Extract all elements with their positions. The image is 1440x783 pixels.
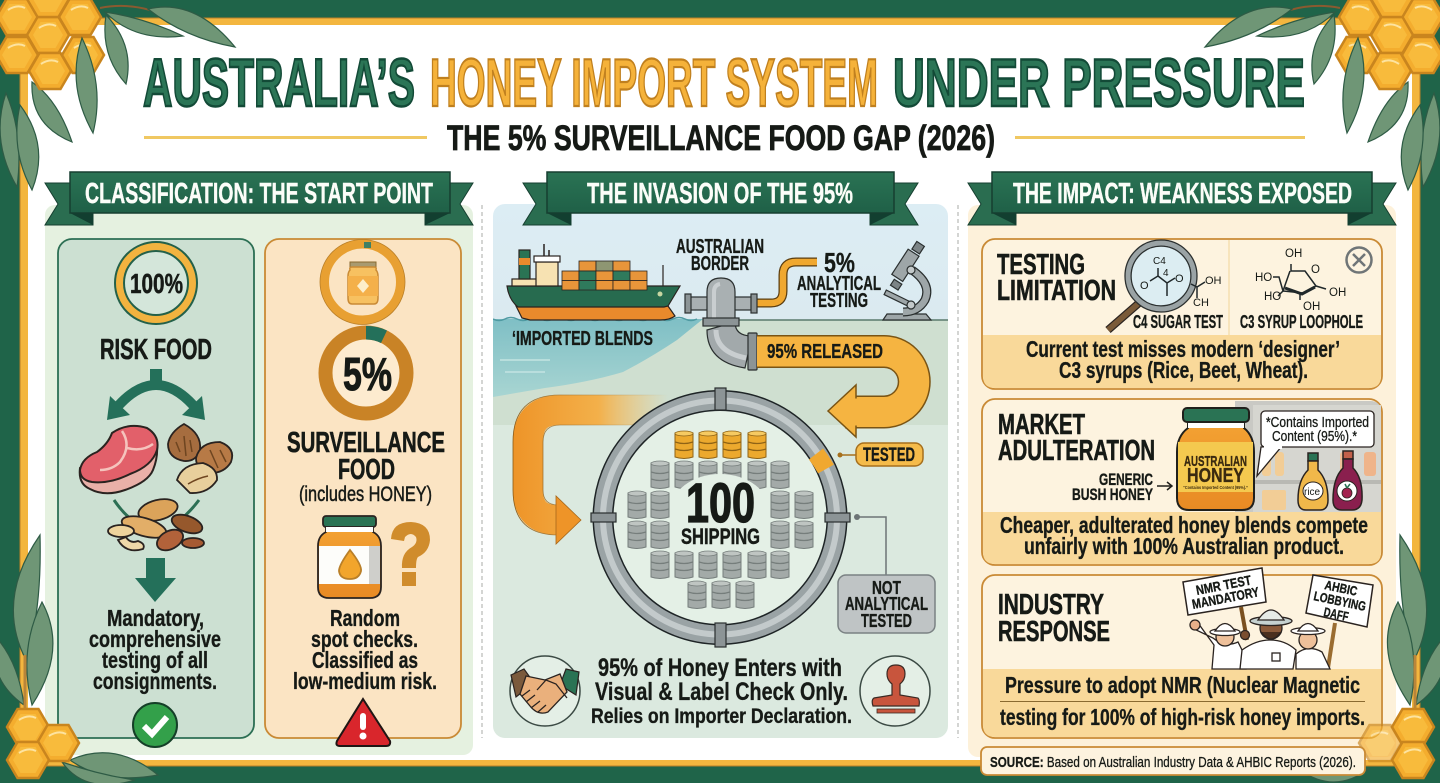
sea	[493, 318, 948, 397]
heading: surveillance food	[287, 427, 445, 506]
label: 5% analytical testing: TESTING	[810, 290, 868, 312]
card: industry response	[982, 568, 1382, 738]
banner: invasion: THE INVASION OF THE 95%	[587, 178, 853, 210]
heading	[998, 589, 1110, 648]
icon: check mark	[133, 703, 177, 747]
sign: NMR test mandatory: MANDATORY	[1191, 584, 1260, 612]
decoration: bottom-right leaves and honeycomb	[1300, 535, 1440, 782]
small gold pipe to testing	[755, 262, 817, 303]
text: visual and label check: Relies on Importer Declaration.	[591, 705, 852, 728]
heading: RESPONSE	[998, 616, 1110, 648]
sign: NMR test mandatory	[1183, 568, 1266, 615]
label: generic bush honey	[1072, 470, 1172, 504]
heading: INDUSTRY	[998, 589, 1104, 621]
label: 100 shipping: SHIPPING	[681, 524, 760, 549]
panel: the impact	[968, 205, 1396, 757]
text: cheaper blends: unfairly with 100% Australian product.	[1024, 533, 1344, 559]
sign: NMR test mandatory: NMR TEST	[1195, 572, 1253, 598]
sign: AHBIC lobbying DAFF: DAFF	[1322, 604, 1350, 624]
icon: question mark	[391, 522, 430, 586]
icon: jar ring	[320, 240, 405, 324]
card: surveillance food	[265, 239, 461, 746]
icon: 5% ring: 5%	[343, 348, 392, 400]
icon: down arrow	[135, 558, 176, 602]
label: C4 sugar test: C4 SUGAR TEST	[1133, 312, 1223, 332]
heading	[997, 249, 1116, 307]
icon: warning triangle	[336, 699, 390, 746]
arrow: 95% released	[757, 352, 914, 437]
label: australian honey: “Contains Imported Content (95%).”	[1183, 485, 1248, 490]
text: random spot checks: spot checks.	[311, 626, 418, 652]
sign: AHBIC lobbying DAFF: LOBBYING	[1312, 588, 1367, 614]
text: random spot checks: low-medium risk.	[293, 668, 437, 694]
source note: SOURCE: Based on Australian Industry Data & AHBIC Reports (2026).	[990, 754, 1356, 771]
text: mandatory testing: consignments.	[93, 668, 217, 694]
callout: not analytical tested: NOT	[872, 577, 902, 598]
decoration: top-left leaves and honeycomb	[0, 0, 235, 190]
icon: magnifier with C4 molecule: O	[1140, 280, 1149, 292]
icon: magnifier with C4 molecule	[1108, 240, 1222, 330]
icon: microscope	[883, 241, 931, 320]
callout: contains imported content: *Contains Imported	[1266, 415, 1369, 431]
heading: surveillance food: FOOD	[338, 454, 395, 486]
label: imported blends: ‘IMPORTED BLENDS	[512, 328, 653, 350]
heading: surveillance food: SURVEILLANCE	[287, 427, 445, 459]
icon: beet syrup bottle	[1333, 451, 1362, 510]
label: generic bush honey: GENERIC	[1099, 470, 1153, 489]
text: visual and label check	[591, 654, 852, 728]
callout: tested	[838, 443, 923, 466]
icon: C3 syrup molecule: OH	[1329, 287, 1346, 299]
panel: invasion of the 95%	[493, 204, 948, 738]
label: australian honey: AUSTRALIAN	[1184, 453, 1247, 470]
decoration: top-right leaves and honeycomb	[1205, 0, 1440, 190]
icon: C3 syrup molecule	[1255, 248, 1346, 313]
label: 100 shipping: 100	[686, 471, 755, 534]
heading: MARKET	[998, 409, 1085, 441]
heading: TESTING	[997, 249, 1085, 281]
text: mandatory testing: Mandatory,	[107, 605, 204, 631]
icon: 5% ring	[326, 326, 406, 414]
subtitle	[144, 119, 1305, 158]
icon: C3 syrup molecule: OH	[1285, 248, 1302, 260]
label: australian honey	[1183, 453, 1248, 490]
text: current test: Current test misses modern ‘designer’	[1026, 336, 1340, 362]
icon: whole nuts	[168, 424, 232, 493]
label: generic bush honey: BUSH HONEY	[1072, 485, 1153, 504]
icon: magnifier with C4 molecule: C4	[1153, 256, 1166, 267]
icon: splitting arrows	[107, 369, 205, 420]
callout: tested: TESTED	[863, 445, 915, 466]
panel: classification	[45, 205, 473, 755]
shelf background	[1235, 401, 1381, 512]
icon: cross mark	[1346, 248, 1372, 272]
text: mandatory testing: comprehensive	[89, 626, 221, 652]
icon: C3 syrup molecule: HO	[1264, 291, 1281, 303]
card: risk food	[58, 239, 254, 747]
heading: surveillance food: (includes HONEY)	[299, 483, 432, 506]
label: australian honey: HONEY	[1187, 465, 1245, 487]
divider	[482, 205, 958, 738]
label: australian border	[676, 238, 764, 270]
text: pressure to adopt NMR	[1000, 672, 1365, 730]
icon: magnifier with C4 molecule: O	[1175, 273, 1184, 285]
text: random spot checks: Random	[330, 605, 400, 631]
icon: mixed nuts	[108, 495, 205, 555]
heading	[998, 409, 1155, 467]
icon: stamp	[860, 656, 930, 726]
icon: rice syrup bottle: rice	[1304, 487, 1321, 498]
barrels: not tested	[628, 461, 813, 608]
subtitle: THE 5% SURVEILLANCE FOOD GAP (2026)	[447, 119, 995, 158]
text: mandatory testing: testing of all	[102, 647, 208, 673]
heading: ADULTERATION	[998, 435, 1155, 467]
callout: not analytical tested: TESTED	[861, 610, 912, 631]
text: mandatory testing	[89, 605, 221, 694]
callout: contains imported content	[1257, 411, 1374, 476]
text: cheaper blends	[1000, 512, 1368, 559]
heading: LIMITATION	[997, 275, 1116, 307]
text: visual and label check: 95% of Honey Enters with	[598, 654, 842, 682]
banner: impact	[968, 172, 1396, 225]
text: visual and label check: Visual & Label Check Only.	[595, 678, 848, 706]
title: AUSTRALIA’S	[143, 45, 415, 121]
callout: not analytical tested	[838, 514, 935, 633]
label: 95% released: 95% RELEASED	[767, 341, 883, 363]
icon: magnifier with C4 molecule: CH	[1193, 297, 1209, 309]
label: C3 syrup loophole: C3 SYRUP LOOPHOLE	[1240, 312, 1363, 332]
label: 5% analytical testing: ANALYTICAL	[797, 273, 881, 295]
sign: AHBIC lobbying DAFF	[1306, 575, 1373, 627]
banner: classification: CLASSIFICATION: THE START POINT	[85, 178, 433, 210]
icon: container ship	[507, 244, 680, 320]
tested ring segment	[816, 454, 826, 469]
icon: C3 syrup molecule: O	[1311, 264, 1320, 276]
decoration: bottom-left leaves and honeycomb	[0, 535, 158, 783]
card: testing limitation	[982, 239, 1382, 389]
arrow: orange inflow	[513, 395, 668, 544]
chart: pipe ring of 100 shipments	[591, 388, 850, 647]
callout: contains imported content: Content (95%).*	[1272, 429, 1357, 445]
banner: invasion	[523, 172, 918, 225]
icon: handshake	[510, 656, 580, 726]
barrels: tested	[675, 431, 766, 458]
label: australian border: AUSTRALIAN	[676, 236, 764, 258]
icon: C3 syrup molecule: HO	[1255, 272, 1272, 284]
card: market adulteration	[982, 399, 1382, 565]
icon: 100% ring: 100%	[130, 268, 183, 299]
icon: honey jar	[318, 516, 381, 598]
label: 5% analytical testing: 5%	[824, 247, 855, 278]
icon: C3 syrup molecule: OH	[1303, 301, 1320, 313]
label: australian border: BORDER	[691, 253, 749, 275]
icon: raw meat	[80, 426, 158, 493]
callout: not analytical tested: ANALYTICAL	[845, 593, 928, 614]
text: current test	[1026, 336, 1340, 383]
title: HONEY IMPORT SYSTEM	[430, 45, 878, 121]
icon: magnifier with C4 molecule: 4	[1163, 268, 1169, 279]
heading: risk food: RISK FOOD	[100, 334, 212, 366]
sign: AHBIC lobbying DAFF: AHBIC	[1323, 577, 1359, 599]
text: random spot checks	[293, 605, 437, 694]
text: random spot checks: Classified as	[312, 647, 418, 673]
icon: rice syrup bottle	[1298, 453, 1328, 510]
banner: classification	[45, 172, 473, 225]
label: 5% analytical testing	[797, 252, 881, 308]
icon: border pipe	[685, 278, 757, 370]
source note	[981, 747, 1365, 775]
icon: honey jar label	[1177, 408, 1254, 510]
icon: protesting beekeepers	[1190, 607, 1335, 669]
icon: magnifier with C4 molecule: OH	[1205, 275, 1222, 287]
label: 100 shipping	[681, 482, 760, 544]
icon: 100% ring	[115, 242, 197, 324]
text: current test: C3 syrups (Rice, Beet, Wheat).	[1059, 357, 1308, 383]
